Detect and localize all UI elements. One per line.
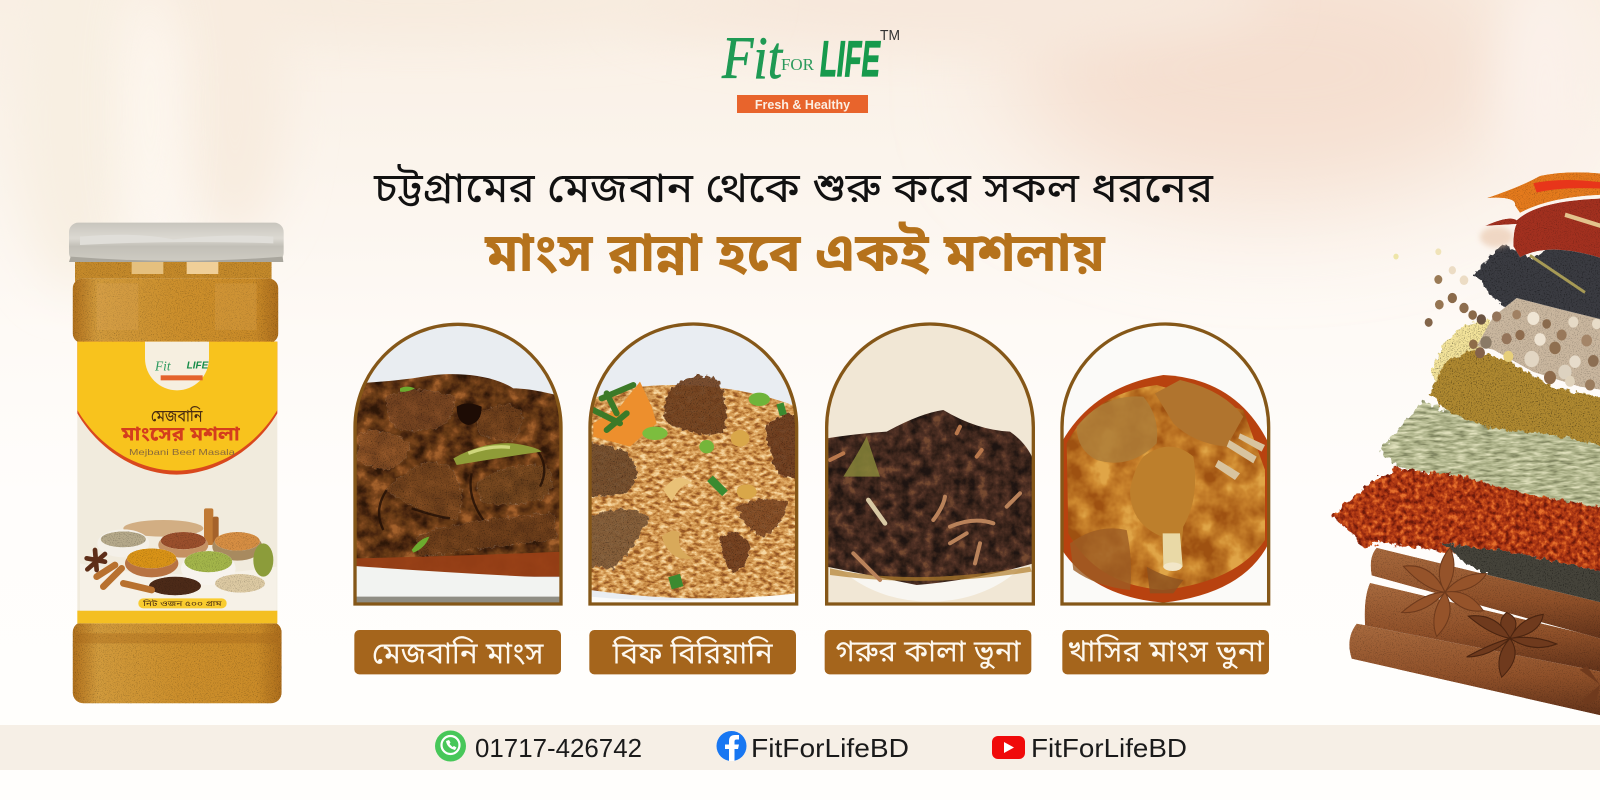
photo <box>1064 375 1267 602</box>
product jar <box>69 223 284 703</box>
logo word: FOR: FOR <box>781 55 815 74</box>
chilli flakes <box>1332 468 1600 594</box>
jar lid <box>69 223 284 262</box>
food card 3: beef kala bhuna <box>815 323 1045 674</box>
logo word: Fit: Fit <box>721 25 783 91</box>
curry powder <box>1430 350 1600 468</box>
label bottom band <box>77 611 277 623</box>
jar bottom powder <box>73 622 282 703</box>
label pill: খাসির মাংস ভুনা <box>1067 634 1265 670</box>
youtube contact <box>992 733 1187 763</box>
spice bowls picture <box>80 508 277 611</box>
rosemary <box>1380 402 1600 524</box>
logo: Fit For Life <box>721 25 900 113</box>
icon: whatsapp <box>435 730 466 762</box>
label text: মাংসের মশলা <box>120 424 240 446</box>
logo word: LIFE: LIFE <box>820 31 881 87</box>
label yellow top <box>77 342 277 475</box>
star anise 3 <box>1580 666 1600 705</box>
jar body top powder <box>73 260 278 343</box>
photo <box>828 326 1032 602</box>
food card 4: mutton bhuna <box>1060 323 1270 674</box>
cinnamon sticks <box>1349 548 1600 720</box>
arch frame <box>355 324 561 604</box>
headline line 2: মাংস রান্না হবে একই মশলায় <box>484 222 1106 283</box>
label text: Mejbani Beef Masala <box>129 447 235 457</box>
facebook handle: FitForLifeBD <box>751 733 909 763</box>
label white logo badge: Fit <box>154 359 171 374</box>
star anise 2 <box>1467 612 1557 677</box>
headline line 1: চট্টগ্রামের মেজবান থেকে শুরু করে সকল ধরনের <box>373 164 1214 211</box>
logo tagline <box>737 95 868 113</box>
label white logo badge: LIFE <box>187 360 209 371</box>
trademark: TM <box>880 27 900 44</box>
food card 2: beef biryani <box>585 323 805 674</box>
spice stack <box>1332 172 1600 720</box>
arch frame <box>590 324 797 604</box>
label text <box>120 407 240 457</box>
contact bar <box>0 725 1600 770</box>
orange dust <box>1480 227 1513 247</box>
label white logo badge <box>145 342 209 390</box>
food card 1: mezbani meat <box>353 323 563 674</box>
youtube handle: FitForLifeBD <box>1031 733 1187 763</box>
arch frame <box>827 324 1033 604</box>
label pill: বিফ বিরিয়ানি <box>612 635 773 670</box>
whatsapp contact <box>435 730 642 763</box>
phone number: 01717-426742 <box>475 733 642 763</box>
black seeds <box>1475 242 1600 342</box>
photo <box>353 323 563 606</box>
net weight pill <box>138 598 227 608</box>
label pill: মেজবানি মাংস <box>372 635 544 670</box>
facebook contact <box>716 731 909 763</box>
yellow dust <box>1430 320 1493 387</box>
label pill <box>354 630 561 674</box>
jar label <box>77 342 277 623</box>
logo tagline: Fresh & Healthy <box>755 98 850 112</box>
label pill: গরুর কালা ভুনা <box>835 635 1021 670</box>
icon: youtube <box>992 736 1025 759</box>
black pepper strip <box>1440 542 1600 616</box>
star anise 1 <box>1402 548 1487 637</box>
pepper and pea pile <box>1393 248 1600 392</box>
dried chillies <box>1485 172 1600 265</box>
photo <box>592 326 795 600</box>
net weight pill: নিট ওজন ৫০০ গ্রাম <box>142 599 222 608</box>
label pill <box>589 630 796 674</box>
icon: facebook <box>716 731 746 761</box>
label text: মেজবানি <box>151 407 203 426</box>
arch frame <box>1062 324 1269 604</box>
